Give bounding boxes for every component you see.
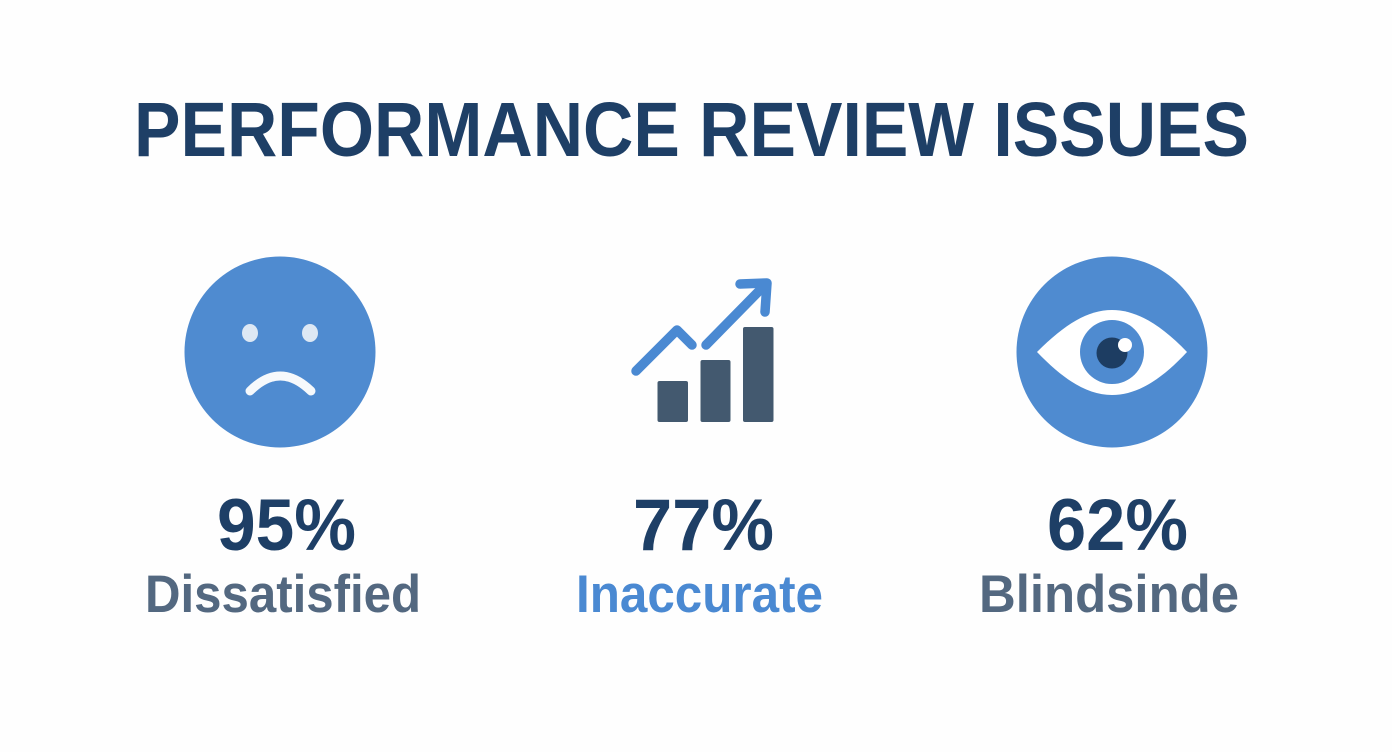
stat: 95%: 95% [217, 485, 356, 566]
stat: 77%: 77% [633, 485, 774, 566]
icon: rising bar chart with arrow [636, 283, 774, 422]
label: Inaccurate: Inaccurate [576, 565, 823, 624]
title: PERFORMANCE REVIEW ISSUES [134, 87, 1249, 173]
icon: sad face [184, 256, 376, 448]
stat: 62%: 62% [1047, 485, 1188, 566]
label: Blindsinde: Blindsinde [979, 565, 1239, 624]
label: Dissatisfied: Dissatisfied [145, 565, 421, 624]
icon: eye [1016, 256, 1208, 448]
